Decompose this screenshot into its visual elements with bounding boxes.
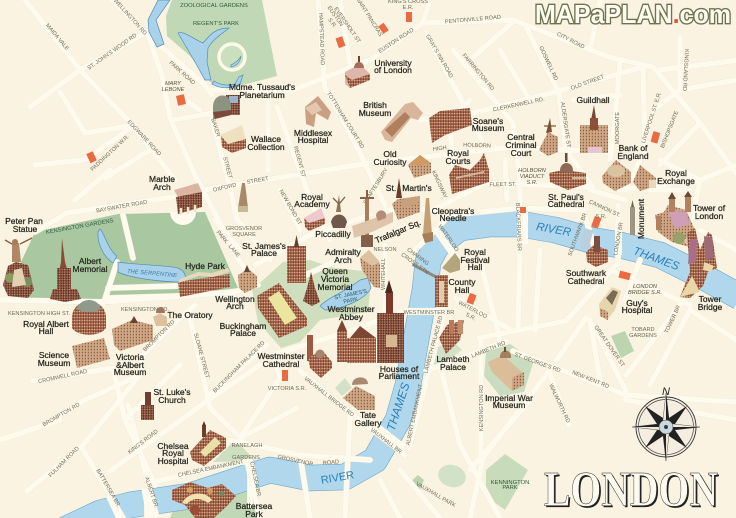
building: Victoria and Albert Museum <box>112 316 153 351</box>
building: Houses of Parliament <box>377 280 404 363</box>
road name labels: LONDON <box>633 284 658 290</box>
label: Admiralty Arch: Arch <box>334 255 352 265</box>
lakes and ponds <box>98 0 371 310</box>
Southwark bridge pier <box>580 228 593 250</box>
water labels: THE SERPENTINE <box>127 269 178 279</box>
road name labels: PADDINGTON W.R. <box>90 134 131 173</box>
water labels: THAMES <box>384 381 413 433</box>
road name labels: VAUXHALL BRIDGE RD <box>303 376 355 418</box>
park: Regent's Park <box>166 0 277 85</box>
label: Tate Gallery: Gallery <box>355 418 382 428</box>
road name labels: PENTONVILLE ROAD <box>445 15 501 25</box>
label: Peter Pan Statue: Statue <box>13 224 38 234</box>
label: Royal Festival Hall: Royal <box>464 247 486 257</box>
park: Imperial War Museum grounds <box>484 344 534 396</box>
building: Queen Victoria Memorial <box>303 272 320 306</box>
label: Albert Memorial: Albert <box>79 256 102 266</box>
road name labels: MOORGATE <box>615 112 621 144</box>
The Serpentine <box>118 262 185 282</box>
St James's Park lake <box>320 278 371 310</box>
green park labels: KENNINGTON <box>491 480 529 486</box>
London Bridge <box>615 225 622 255</box>
park: Tobard Gardens <box>611 331 634 358</box>
label: Chelsea Royal Hospital: Chelsea <box>157 441 189 451</box>
building: Royal Festival Hall <box>442 253 460 273</box>
label: Chelsea Royal Hospital: Royal <box>162 448 184 458</box>
road name labels: ALBERT EMBANKMENT <box>406 383 425 446</box>
station: Paddington <box>86 151 97 163</box>
road name labels: KENSINGTON HIGH ST. <box>8 311 70 317</box>
station: St Pancras <box>378 23 389 34</box>
building: Chelsea Royal Hospital <box>190 421 226 466</box>
park: St James's and Green Park <box>252 260 372 348</box>
water labels <box>127 221 681 487</box>
road name labels: REGENT ST <box>292 146 306 178</box>
label: Central Criminal Court: Criminal <box>505 140 537 150</box>
label: Westminster Abbey: Westminster <box>327 304 375 314</box>
label: Imperial War Museum: Museum <box>493 400 525 410</box>
station: Liverpool Street <box>651 131 660 144</box>
building: Westminster Abbey <box>337 320 376 363</box>
park: Kennington Park <box>486 454 528 510</box>
label: Albert Memorial: Memorial <box>73 264 108 274</box>
label: Queen Victoria Memorial: Queen <box>322 266 348 276</box>
station: Blackfriars <box>520 207 526 213</box>
road name labels: VIADUCT <box>520 174 545 180</box>
label: Guy's Hospital: Guy's <box>626 298 648 308</box>
building: Imperial War Museum <box>488 347 524 391</box>
Long Water <box>98 229 117 263</box>
road name labels: MARY <box>165 81 182 87</box>
label: St James's Palace: St. James's <box>242 241 286 251</box>
road name labels: GARDENS <box>232 455 260 461</box>
road name labels: FARRINGTON RD <box>461 53 495 92</box>
label: Wellington Arch: Wellington <box>215 294 255 304</box>
label: Royal Festival Hall: Hall <box>468 262 482 272</box>
road name labels: WATERLOO <box>436 224 460 254</box>
water labels: RIVER <box>535 221 572 239</box>
road name labels: NEW BOND ST <box>277 189 303 227</box>
building: Bank of England <box>602 160 631 191</box>
label: Middlesex Hospital: Middlesex <box>294 128 333 138</box>
label: Westminster Abbey: Abbey <box>339 312 364 322</box>
label: Victoria and Albert Museum: Victoria <box>116 352 144 362</box>
road name labels: S.R. <box>527 180 537 186</box>
label: Central Criminal Court: Court <box>511 148 532 158</box>
road name labels: GROSVENOR <box>226 226 262 232</box>
green park labels: PARK <box>502 485 518 491</box>
building: The Monument <box>630 200 635 235</box>
building: St Martin's <box>392 178 420 220</box>
label: Cleopatra's Needle: Cleopatra's <box>432 206 474 216</box>
building: Guy's Hospital <box>599 287 621 320</box>
road name labels: CHELSEA BR. <box>248 461 262 499</box>
building: National Gallery <box>352 210 393 238</box>
road name labels: BUCKINGHAM PALACE RD <box>212 340 266 394</box>
building: Battersea Park illustration <box>172 482 236 518</box>
label: Wallace Collection: Collection <box>247 142 285 152</box>
road name labels: TOBARD <box>631 327 655 333</box>
building: Royal Academy <box>304 208 325 231</box>
road name labels: GRAY'S INN ROAD <box>424 34 454 79</box>
label: Houses of Parliament: Parliament <box>379 371 420 381</box>
water labels: ST. JAMES'S <box>334 289 368 301</box>
road name labels: LIVERPOOL ST. E.R. <box>641 91 663 144</box>
road name labels: PARK <box>215 230 229 245</box>
water labels: THAMES <box>631 245 681 273</box>
label: Royal Academy: Royal <box>301 192 323 202</box>
label: Tower Bridge: Bridge <box>698 302 723 312</box>
building: monument on Oxford Street <box>238 183 248 212</box>
green park labels <box>46 3 529 491</box>
canal in Regent's Park <box>148 0 170 47</box>
label: St James's Palace: Palace <box>251 248 277 258</box>
building: Buckingham Palace <box>257 283 307 338</box>
park: Lambeth Palace grounds <box>432 340 462 372</box>
road name labels: TOWER BR <box>664 305 682 334</box>
Regent's Park lake <box>178 28 229 80</box>
railway station markers <box>86 12 660 381</box>
Regent's Park south water <box>212 75 243 88</box>
road name labels: BAYSWATER ROAD <box>96 200 148 214</box>
building: St James's Palace <box>287 235 306 283</box>
road name labels: NEW KENT RD <box>571 370 610 390</box>
label: Trafalgar Square: Trafalgar Sq. <box>373 217 422 245</box>
green park labels: REGENT'S PARK <box>193 21 239 27</box>
road name labels: GREAT DOVER ST <box>592 325 626 369</box>
road name labels: EUSTON <box>326 5 344 28</box>
green park labels: KENSINGTON GARDENS <box>46 218 114 236</box>
label: Battersea Park: Battersea <box>236 501 272 511</box>
label: Admiralty Arch: Admiralty <box>325 247 361 257</box>
building: Southwark Cathedral <box>586 236 608 267</box>
road name labels: ST. JOHN'S WOOD RD <box>87 33 138 72</box>
road name labels: KENSINGTON RD <box>479 385 485 431</box>
road name labels: PARK ROAD <box>168 60 196 86</box>
water labels: RIVER <box>320 469 355 487</box>
road name labels: NELSON <box>373 247 397 253</box>
station: London Bridge <box>618 271 631 280</box>
building: Westminster Cathedral <box>307 335 332 378</box>
road name labels: CHELSEA EMBANKMENT <box>177 459 245 479</box>
label: County Hall: Hall <box>455 285 469 295</box>
road name labels: LAMBETH PALACE RD <box>423 315 445 374</box>
station: Victoria <box>282 370 288 381</box>
park: Vauxhall Park <box>408 475 424 494</box>
road name labels: SOUTHWARK BR <box>567 212 589 257</box>
road name labels: CHARING <box>405 247 430 267</box>
building: Peter Pan statue <box>3 238 34 298</box>
label: Imperial War Museum: Imperial War <box>485 393 533 403</box>
road name labels: ALDERSGATE ST <box>559 102 571 149</box>
road name labels: STREET <box>246 176 270 186</box>
Vauxhall Bridge <box>376 424 406 450</box>
building: Cleopatra's Needle <box>422 198 433 243</box>
label: Southwark Cathedral: Southwark <box>566 268 607 278</box>
label: Southwark Cathedral: Cathedral <box>568 276 605 286</box>
road name labels: VAUXHALL BR <box>369 427 402 455</box>
compass rose <box>632 386 700 461</box>
building: Tower Bridge <box>680 228 717 298</box>
label: Royal Albert Hall: Royal Albert <box>23 319 70 329</box>
building: Royal Exchange <box>633 165 656 191</box>
label: Buckingham Palace: Palace <box>230 328 256 338</box>
label: Royal Albert Hall: Hall <box>39 326 53 336</box>
building: Royal Albert Hall <box>72 300 106 335</box>
road name labels: BATTERSEA BR. <box>94 468 122 509</box>
label: Chelsea Royal Hospital: Hospital <box>158 456 188 466</box>
Waterloo Bridge <box>436 229 460 261</box>
label: Tate Gallery: Tate <box>360 410 376 420</box>
building: Soane's Museum <box>429 108 472 143</box>
road name labels: FLEET ST. <box>489 182 517 188</box>
Albert Bridge <box>141 488 154 518</box>
green park labels: ZOOLOGICAL GARDENS <box>180 3 248 9</box>
label: Wellington Arch: Arch <box>226 301 244 311</box>
park: Green Square <box>335 378 352 396</box>
label: County Hall: County <box>449 277 476 287</box>
road name labels: CROMWELL ROAD <box>38 369 88 385</box>
label: The Oratory: The Oratory <box>167 310 213 320</box>
road name labels: LEBONE <box>162 87 185 93</box>
label: Victoria and Albert Museum: Museum <box>114 367 146 377</box>
station: Marylebone <box>176 94 186 106</box>
building: Middlesex Hospital <box>305 96 331 127</box>
road name labels: STREET <box>221 156 233 180</box>
building: Admiralty Arch <box>360 250 380 288</box>
label: St Paul's Cathedral: Cathedral <box>548 199 585 209</box>
label: St Luke's Church: St. Luke's <box>153 387 191 397</box>
label: Old Curiosity: Curiosity <box>373 157 407 167</box>
road name labels: KINGSLAND RD <box>681 49 689 91</box>
Regent's Park circle <box>219 44 245 70</box>
road name labels: EUSTON ROAD <box>378 27 415 55</box>
road name labels: BLACKFRIARS BR <box>514 203 522 251</box>
label: Bank of England: Bank of <box>619 143 648 153</box>
road name labels: RANELAGH <box>232 443 262 449</box>
label: Wallace Collection: Wallace <box>251 134 281 144</box>
label: Tower of London: Tower of <box>693 203 726 213</box>
road name labels: SQUARE <box>232 232 256 238</box>
road name labels: BISHOPSGATE <box>660 110 680 149</box>
building: Albert Memorial <box>50 238 81 302</box>
park: Battersea Park <box>170 480 262 518</box>
road name labels: LAMBETH RD <box>471 341 506 360</box>
road name labels: S.R. <box>596 214 607 220</box>
label: Royal Festival Hall: Festival <box>460 255 490 265</box>
water labels: PARK <box>343 296 359 305</box>
label: British Museum: British <box>363 100 387 110</box>
road name labels: OLD STREET <box>570 74 606 92</box>
Regent's Park pond <box>231 56 241 67</box>
building: Guildhall <box>580 105 608 153</box>
road name labels: KING'S ROAD <box>127 429 159 456</box>
road name labels: KENSINGTON RD. <box>121 307 169 313</box>
road name labels: CROSS STN <box>400 252 430 276</box>
road name labels: LANE <box>227 244 241 259</box>
label: Royal Exchange: Exchange <box>657 176 695 186</box>
road name labels: VAUXHALL PARK <box>415 481 457 509</box>
road name labels: BROMPTON RD <box>142 319 176 353</box>
station: Euston <box>336 36 346 48</box>
label: St Paul's Cathedral: St. Paul's <box>548 192 584 202</box>
road name labels: WATERLOO <box>457 300 488 320</box>
park: Kennington circle <box>436 462 468 490</box>
road name labels: OXFORD <box>212 182 237 194</box>
label: St Luke's Church: Church <box>158 395 186 405</box>
road name labels: HIGH <box>433 145 447 153</box>
label: Guy's Hospital: Hospital <box>622 305 652 315</box>
label: Madame Tussaud's Planetarium: Planetarium <box>239 90 285 100</box>
bridges <box>106 212 622 518</box>
station: King's Cross <box>406 12 412 22</box>
road name labels: S.R. <box>326 17 338 30</box>
building: Tate Gallery <box>343 377 375 410</box>
label: Westminster Cathedral: Cathedral <box>263 359 300 369</box>
building: County Hall <box>435 275 448 307</box>
label: Marble Arch: Arch <box>153 182 171 192</box>
road name labels: HOLBORN <box>518 168 547 174</box>
park: Kensington Gardens and Hyde Park <box>8 212 238 306</box>
label: Madame Tussaud's Planetarium: Mdme. Tussaud's <box>229 82 295 92</box>
building: Hyde Park terrace <box>178 268 230 297</box>
label: University of London: University <box>374 58 412 68</box>
station: Cannon Street <box>591 216 602 229</box>
label: Royal Courts: Courts <box>445 156 471 166</box>
Battersea Bridge <box>106 494 123 518</box>
road name labels: ROAD <box>323 459 339 467</box>
building: Old Curiosity Shop <box>408 155 431 178</box>
road name labels: HOLBORN <box>463 143 491 149</box>
label: Lambeth Palace: Lambeth <box>436 354 470 364</box>
road name labels: EDGWARE ROAD <box>126 119 162 157</box>
label: Victoria and Albert Museum: &Albert <box>116 360 145 370</box>
building: University of London <box>345 56 370 88</box>
road name labels: GROSVENOR <box>277 454 314 468</box>
building: Tower of London <box>655 191 700 250</box>
label: Royal Academy: Academy <box>294 199 330 209</box>
Speakers' Corner semicircle <box>170 212 196 225</box>
label: Science Museum: Science <box>39 350 69 360</box>
label: Queen Victoria Memorial: Memorial <box>318 282 353 292</box>
road name labels: EVERSHOLT ST <box>332 6 362 45</box>
road name labels: BAKER <box>209 118 221 138</box>
label: Guildhall: Guildhall <box>576 95 610 105</box>
label: Westminster Cathedral: Westminster <box>257 351 305 361</box>
label: Central Criminal Court: Central <box>507 132 535 142</box>
building: Marble Arch <box>174 183 202 215</box>
road name labels: ALBERT BR. <box>143 476 159 509</box>
label: Queen Victoria Memorial: Victoria <box>321 274 349 284</box>
compass rose: N <box>662 386 670 398</box>
road name labels: TOTTENHAM COURT RD <box>325 91 365 150</box>
road name labels: WALWORTH RD <box>547 383 571 424</box>
station: Waterloo <box>467 293 477 305</box>
road name labels: WHITEHALL <box>381 258 387 290</box>
road name labels: E.R. <box>403 5 414 11</box>
road name labels: SHAFTESBURY <box>363 167 390 206</box>
building: Nelson's Column <box>360 190 374 247</box>
building: Central Criminal Court <box>539 118 558 156</box>
road name labels: VICTORIA S.R. <box>268 386 307 392</box>
Charing Cross rail bridge <box>412 263 440 280</box>
label: Piccadilly: Piccadilly <box>315 229 351 239</box>
label: Tower of London: London <box>695 211 723 221</box>
label: Peter Pan Statue: Peter Pan <box>5 216 43 226</box>
label: Old Curiosity: Old <box>383 149 397 159</box>
label: Royal Courts: Royal <box>447 148 469 158</box>
building: St Luke's Church <box>141 392 154 420</box>
building: Lambeth Palace <box>439 320 464 354</box>
label: Marble Arch: Marble <box>149 174 175 184</box>
Westminster Bridge <box>405 308 445 314</box>
building: British Museum <box>381 102 423 142</box>
label: Hyde Park: Hyde Park <box>185 261 226 271</box>
building: Wellington Arch <box>238 265 257 293</box>
road name labels: CANNON ST. <box>588 199 621 219</box>
road name labels: GOSWELL RD <box>537 46 558 82</box>
label: Buckingham Palace: Buckingham <box>220 321 266 331</box>
road name labels: FULHAM ROAD <box>48 446 81 479</box>
road name labels: MAIDA VALE <box>44 23 70 52</box>
label: Science Museum: Museum <box>38 358 70 368</box>
Chelsea Bridge <box>245 461 258 485</box>
building: Wallace Collection <box>220 125 246 153</box>
building: The Oratory <box>153 307 167 326</box>
label: University of London: of London <box>374 65 412 75</box>
building: Royal Courts of Justice <box>449 153 489 194</box>
road name labels: BRIDGE S.R. <box>628 290 662 296</box>
road name labels: HAMPSTEAD ROAD <box>317 13 325 65</box>
label: Royal Exchange: Royal <box>665 168 687 178</box>
road name labels: CITY ROAD <box>556 32 585 51</box>
label: British Museum: Museum <box>359 108 391 118</box>
park: Ranelagh Gardens <box>213 440 256 462</box>
road name labels: ST. GEORGE'S RD <box>513 352 561 374</box>
label: Houses of Parliament: Houses of <box>380 364 419 374</box>
road name labels: LONDON BR <box>613 222 625 256</box>
road name labels: BROMPTON RD <box>42 402 81 428</box>
road name labels: GARDENS <box>629 333 657 339</box>
label: Middlesex Hospital: Hospital <box>298 135 328 145</box>
label: Lambeth Palace: Palace <box>440 362 466 372</box>
building: Science Museum <box>72 338 110 368</box>
road name labels: WESTMINSTER BR <box>404 310 454 316</box>
label: Bank of England: England <box>617 151 649 161</box>
label: Monument: Monument <box>636 198 646 239</box>
road name labels: SLOANE STREET <box>192 333 210 379</box>
label: Soane's Museum: Museum <box>472 123 504 133</box>
building: Madame Tussaud's and Planetarium <box>213 95 240 119</box>
label: Cleopatra's Needle: Needle <box>440 213 467 223</box>
label: Tower Bridge: Tower <box>699 294 721 304</box>
label: Soane's Museum: Soane's <box>473 116 503 126</box>
building: St Paul's Cathedral <box>549 153 586 190</box>
Blackfriars bridge <box>523 212 528 244</box>
label: St Martin's: Martin's <box>402 183 432 193</box>
label: St Martin's: St. <box>386 183 396 193</box>
road name labels: CLERKENWELL RD. <box>492 97 546 113</box>
River Thames <box>60 224 736 518</box>
building: Eros statue <box>331 195 347 228</box>
road name labels: S.R. <box>464 312 477 323</box>
road name labels: KINGSWAY <box>430 170 448 199</box>
